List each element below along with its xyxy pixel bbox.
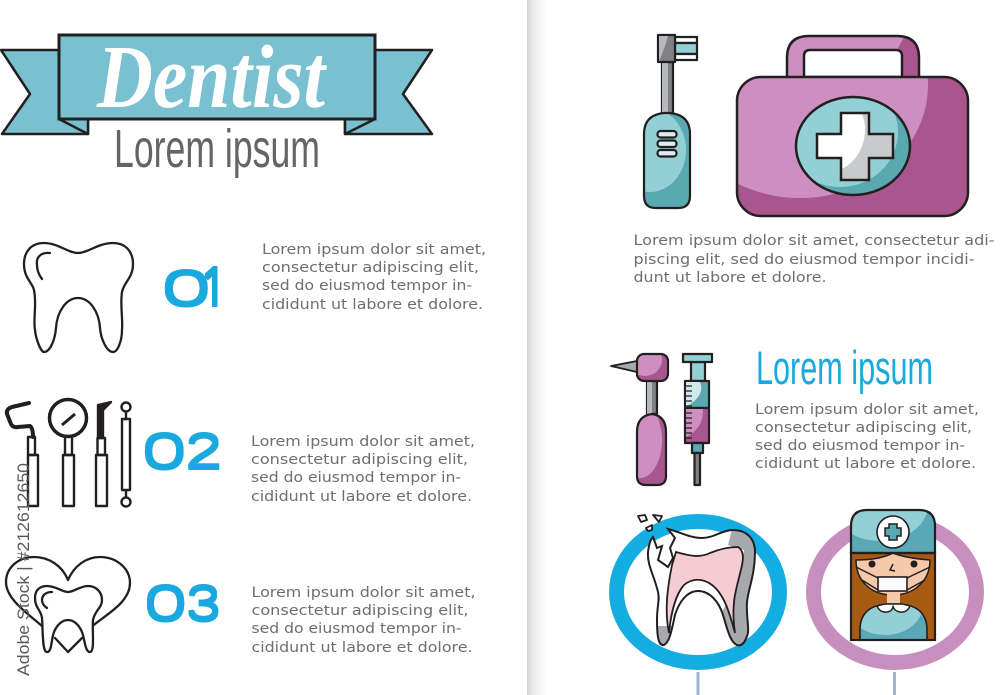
text block 01: Lorem ipsum dolor sit amet, (262, 242, 486, 258)
text block 03: cididunt ut labore et dolore. (252, 640, 472, 656)
subtitle: Lorem ipsum (114, 119, 320, 179)
icon: tooth outline (24, 243, 133, 352)
text block 03: Lorem ipsum dolor sit amet, (252, 585, 476, 601)
text block 02 (251, 434, 475, 505)
number 03: 0 (144, 576, 187, 632)
number 01: 1 (198, 264, 229, 314)
title ribbon banner: Dentist (96, 28, 328, 127)
text block: right column: Lorem ipsum dolor sit amet, (755, 402, 979, 418)
icon: dental tools (7, 400, 131, 506)
icon: dentist with mask (850, 508, 936, 642)
text block 03: consectetur adipiscing elit, (252, 603, 468, 619)
blue ring with stem (616, 522, 780, 695)
vertical stock credit: Adobe Stock | #212612650 (14, 463, 33, 676)
text block 01: cididunt ut labore et dolore. (262, 297, 483, 313)
text block 01: consectetur adipiscing elit, (262, 260, 479, 276)
text block 03: sed do eiusmod tempor in- (252, 621, 462, 637)
text block: right column: sed do eiusmod tempor in- (755, 438, 965, 454)
icon: syringe (683, 354, 712, 485)
text block 02: cididunt ut labore et dolore. (251, 489, 472, 505)
number 01: 0 (161, 260, 211, 316)
icon: first aid kit (736, 34, 970, 218)
text block: kit description: dunt ut labore et dolore. (634, 270, 826, 286)
icon: chipped tooth (638, 515, 760, 650)
title ribbon banner (1, 28, 432, 134)
number 02: 2 (185, 424, 222, 480)
icon: dental drill (611, 344, 668, 485)
text block 02: Lorem ipsum dolor sit amet, (251, 434, 475, 450)
text block 01 (262, 242, 486, 313)
text block: kit description (634, 233, 994, 286)
icon: electric toothbrush (642, 34, 698, 210)
text block 03 (252, 585, 476, 656)
purple ring with stem (814, 522, 976, 695)
text block: right column (755, 402, 979, 472)
text block: right column: consectetur adipiscing elit, (755, 420, 972, 436)
text block 02: consectetur adipiscing elit, (251, 452, 468, 468)
text block: kit description: Lorem ipsum dolor sit amet, consectetur adi- (634, 233, 994, 249)
number 02: 0 (142, 424, 187, 480)
icon: tooth in heart (6, 557, 130, 652)
text block: right column: cididunt ut labore et dolore. (755, 456, 976, 472)
number 03: 3 (186, 576, 221, 632)
text block 02: sed do eiusmod tempor in- (251, 470, 461, 486)
text block: kit description: piscing elit, sed do eiusmod tempor incidi- (634, 252, 974, 268)
text block 01: sed do eiusmod tempor in- (262, 278, 472, 294)
